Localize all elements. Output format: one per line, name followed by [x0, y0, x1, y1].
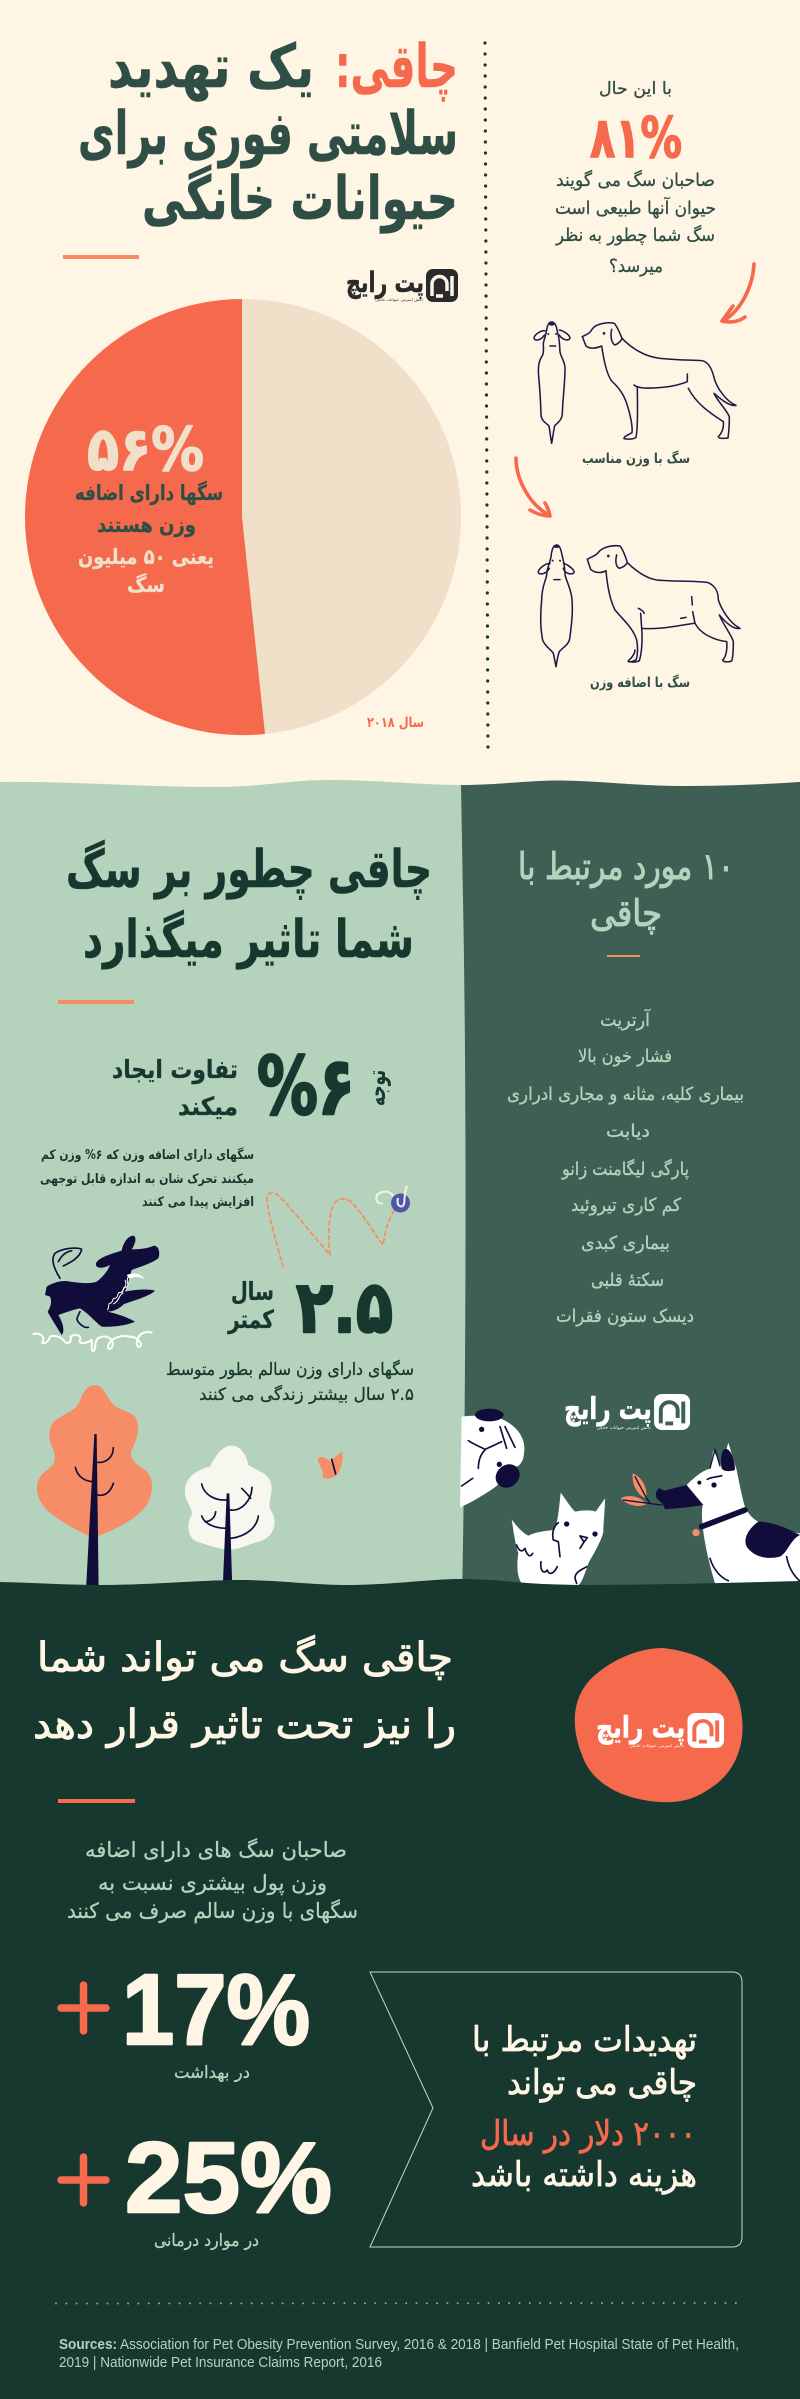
conditions list heading [518, 845, 734, 935]
icon: three cartoon dogs [460, 1409, 800, 1585]
callout: threat cost: تهدیدات مرتبط با [472, 2020, 697, 2060]
six percent description: میکنند تحرک شان به اندازه قابل توجهی [40, 1172, 254, 1187]
title: چاقی: [335, 32, 458, 102]
logo: white: دانش اینترنتی حیوانات خانگی [597, 1425, 651, 1431]
logo: on blob: پت رایچ [596, 1710, 685, 1745]
pie label: سگها دارای اضافه [75, 480, 223, 505]
list underline [607, 955, 640, 957]
six percent description: افزایش پیدا می کنند [142, 1195, 254, 1210]
heading underline [58, 1799, 135, 1803]
sources [59, 2336, 739, 2371]
pie label: وزن هستند [97, 513, 196, 537]
title: سلامتی فوری برای [78, 99, 458, 169]
conditions list: بیماری کبدی [581, 1233, 670, 1254]
stat: 25 percent: 25% [125, 2122, 332, 2234]
icon: orange tree [37, 1385, 152, 1590]
conditions list heading: چاقی [590, 892, 662, 935]
pie chart: 56 percent overweight [25, 299, 461, 735]
orange blob [575, 1648, 743, 1802]
heading: چاقی چطور بر سگ [66, 839, 432, 900]
owner perception text: حیوان آنها طبیعی است [555, 196, 716, 219]
conditions list: کم کاری تیروئید [571, 1195, 681, 1216]
conditions list: بیماری کلیه، مثانه و مجاری ادراری [507, 1084, 744, 1105]
logo: dark: دانش اینترنتی حیوانات خانگی [375, 297, 423, 302]
conditions list [507, 1008, 744, 1327]
logo: on blob: دانش اینترنتی حیوانات خانگی [629, 1743, 684, 1749]
stat: six percent: %۶ [257, 1040, 355, 1133]
section backgrounds [0, 0, 800, 1600]
conditions list heading: ۱۰ مورد مرتبط با [518, 845, 734, 888]
ball bounce dotted path [267, 1186, 410, 1267]
conditions list: دیابت [606, 1121, 650, 1142]
title: یک تهدید [108, 32, 314, 102]
six percent description [40, 1147, 254, 1210]
panel: health impact [33, 839, 800, 1590]
conditions list: دیسک ستون فقرات [556, 1306, 694, 1327]
dark background [0, 1579, 800, 2399]
cost description: وزن پول بیشتری نسبت به [98, 1871, 327, 1895]
stat: 17 percent: در بهداشت [174, 2063, 250, 2083]
label: overweight: سگ با اضافه وزن [590, 674, 690, 691]
owner perception text: سگ شما چطور به نظر [555, 224, 715, 246]
owner perception text: میرسد؟ [609, 256, 663, 277]
conditions list: آرتریت [600, 1008, 651, 1031]
heading: را نیز تحت تاثیر قرار دهد [33, 1702, 456, 1748]
title [78, 32, 458, 234]
stat: 2.5 years: سال [231, 1277, 274, 1306]
callout: threat cost: ۲۰۰۰ دلار در سال [480, 2114, 696, 2154]
heading: شما تاثیر میگذارد [83, 909, 414, 970]
callout: threat cost: چاقی می تواند [507, 2063, 697, 2103]
heading: چاقی سگ می تواند شما [37, 1635, 453, 1681]
conditions list: سکتهٔ قلبی [591, 1270, 664, 1291]
logo: white: پت رایچ [564, 1392, 652, 1427]
owner perception text: صاحبان سگ می گویند [556, 169, 715, 191]
icon: ideal weight dogs [534, 322, 736, 443]
icon: overweight dogs [538, 545, 740, 667]
lifespan description: ۲.۵ سال بیشتر زندگی می کنند [199, 1384, 414, 1405]
cost description: صاحبان سگ های دارای اضافه [85, 1838, 347, 1862]
pie label: یعنی ۵۰ میلیون [78, 545, 214, 569]
year label: سال ۲۰۱۸ [367, 715, 424, 731]
icon: running dog [33, 1236, 159, 1351]
icon: rotated word: توجه [363, 1070, 391, 1106]
arrow: to overweight dog [516, 458, 550, 516]
panel: owner cost [0, 1579, 800, 2399]
title: حیوانات خانگی [142, 164, 458, 234]
stat: six percent [112, 1040, 355, 1133]
pie label [75, 415, 223, 597]
heading [33, 1635, 456, 1748]
stat: 2.5 years [226, 1265, 393, 1349]
stat: 17 percent [61, 1954, 310, 2083]
heading underline [58, 1000, 134, 1004]
callout: threat cost: هزینه داشته باشد [471, 2155, 697, 2195]
cost description [67, 1838, 358, 1924]
pie label: سگ [127, 572, 165, 597]
callout: threat cost [370, 1972, 742, 2247]
heading [66, 839, 432, 970]
stat: six percent: تفاوت ایجاد [112, 1055, 238, 1085]
stat: 17 percent: 17% [122, 1954, 310, 2066]
six percent description: سگهای دارای اضافه وزن که ۶% وزن کم [41, 1147, 254, 1163]
conditions list: پارگی لیگامنت زانو [561, 1158, 689, 1180]
sources: Sources: Association for Pet Obesity Prevention Survey, 2016 & 2018 | Banfield Pet Hospital State of Pet Health, [59, 2336, 739, 2353]
stat: 2.5 years: کمتر [226, 1305, 274, 1335]
title underline [63, 255, 139, 259]
lifespan description [166, 1359, 414, 1405]
logo: dark: پت رایچ [346, 266, 424, 299]
sources: 2019 | Nationwide Pet Insurance Claims Report, 2016 [59, 2354, 382, 2371]
lifespan description: سگهای دارای وزن سالم بطور متوسط [166, 1359, 414, 1380]
stat: 2.5 years: ۲.۵ [296, 1265, 393, 1349]
owner perception text: ۸۱% [590, 106, 682, 171]
stat: six percent: میکند [178, 1092, 238, 1121]
pie label: ۵۶% [87, 415, 204, 485]
icon: cream tree [185, 1446, 275, 1590]
owner perception text [555, 79, 716, 277]
icon: ball [376, 1186, 410, 1212]
arrow: to ideal weight dog [722, 264, 754, 322]
owner perception text: با این حال [599, 79, 672, 99]
stat: 25 percent: در موارد درمانی [154, 2231, 259, 2251]
conditions list: فشار خون بالا [578, 1046, 672, 1067]
panel: intro [25, 32, 754, 757]
cost description: سگهای با وزن سالم صرف می کنند [67, 1899, 358, 1924]
icon: butterfly [318, 1452, 343, 1479]
label: ideal weight: سگ با وزن مناسب [582, 450, 690, 467]
stat: 25 percent [61, 2122, 332, 2251]
